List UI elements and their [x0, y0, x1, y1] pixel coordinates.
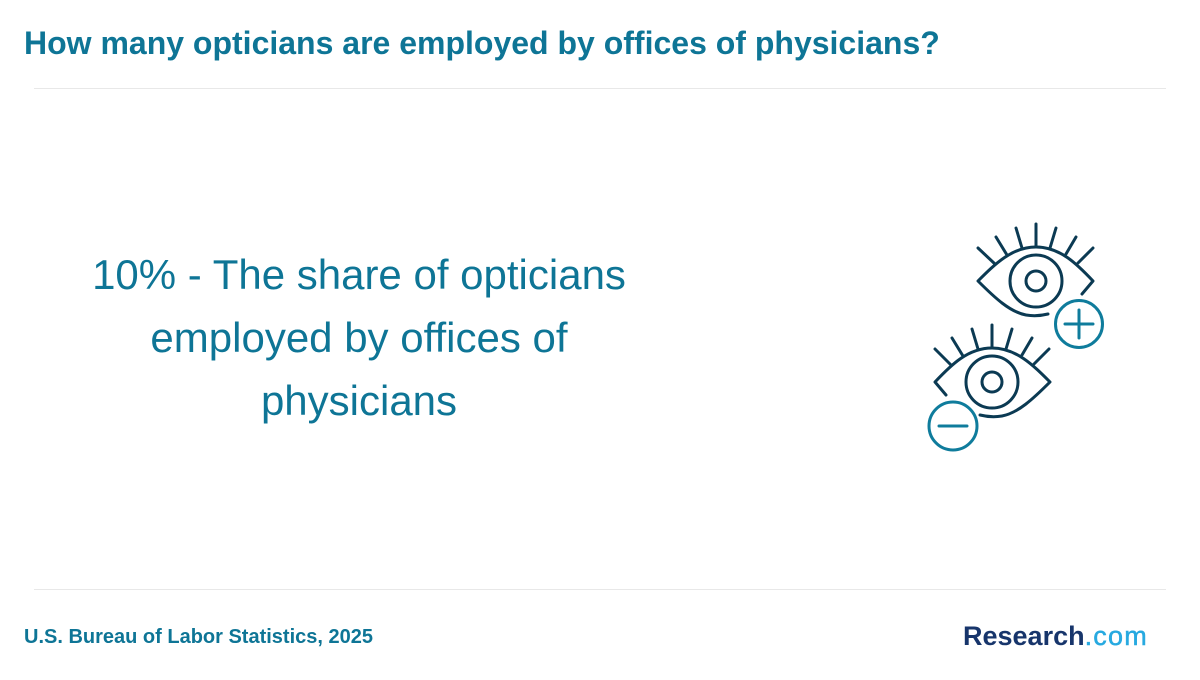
icon: eye with minus — [929, 325, 1050, 450]
main statistic text: employed by offices of — [150, 314, 568, 361]
title: How many opticians are employed by offices of physicians? — [24, 25, 940, 61]
main statistic text: 10% - The share of opticians — [92, 251, 626, 298]
main statistic text — [92, 251, 626, 424]
icon: two eyes with plus and minus — [928, 222, 1104, 452]
main statistic text: physicians — [261, 377, 457, 424]
logo: Research.com: Research.com — [963, 621, 1148, 651]
source note: U.S. Bureau of Labor Statistics, 2025 — [24, 626, 373, 648]
icon: eye with plus — [978, 224, 1102, 348]
